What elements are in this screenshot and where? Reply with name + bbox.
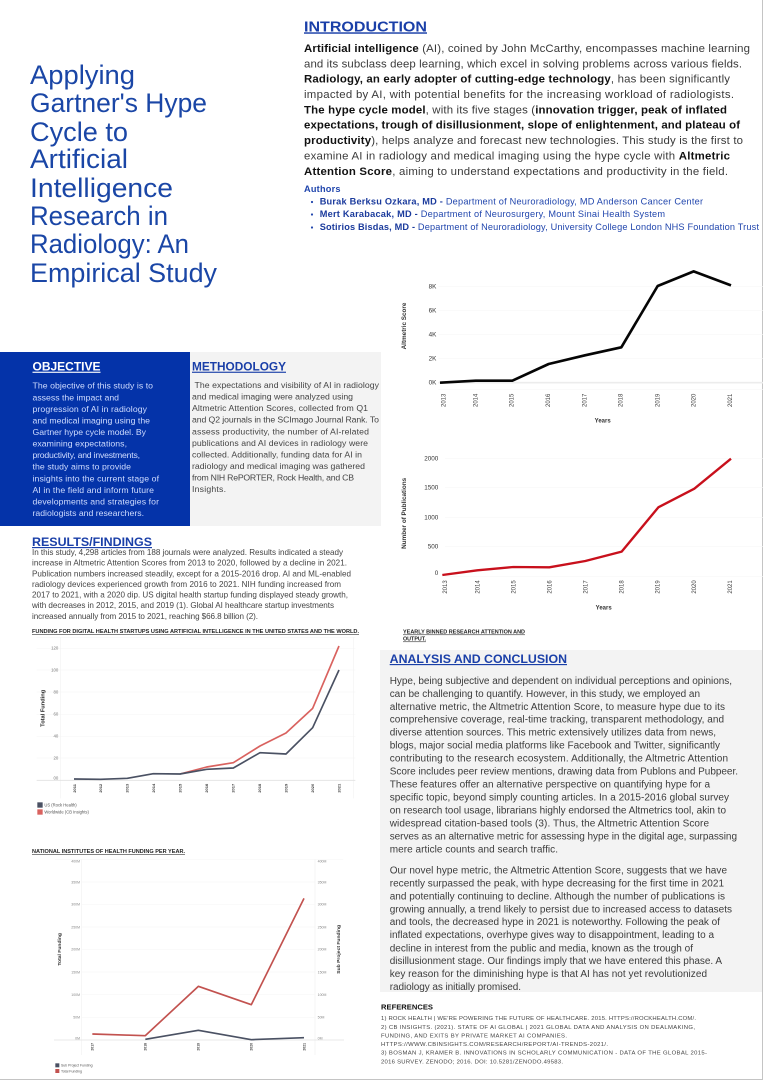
chart: NIH funding per year: 2017	[91, 1043, 95, 1051]
text block: results body: increased annually from 2015 to 2021, reaching $66.8 billion (2).	[32, 612, 258, 621]
text block: analysis paragraph one: mere article counts and search traffic.	[390, 844, 558, 856]
text block: introduction body: impacted by AI, with potential benefits for the increasing workload of radiologists.	[304, 89, 734, 101]
chart title: funding for digital health startups: FUNDING FOR DIGITAL HEALTH STARTUPS USING ARTIFICIAL INTELLIGENCE IN THE UNITED STATES AND THE WORLD.	[32, 629, 359, 635]
text block: objective body: assess the impact and	[32, 392, 119, 402]
chart: digital health startup funding: 2014	[151, 783, 156, 793]
chart: altmetric score per year: Altmetric Score	[401, 302, 408, 349]
heading: analysis and conclusion: ANALYSIS AND CONCLUSION	[390, 654, 567, 666]
chart: digital health startup funding: 80	[54, 689, 59, 694]
title: Intelligence	[30, 173, 173, 203]
text block: methodology body: publications and AI devices in radiology were	[192, 438, 368, 448]
chart: altmetric score per year: 2014	[474, 393, 480, 407]
panel: introduction	[304, 19, 759, 232]
title: Gartner's Hype	[30, 88, 207, 118]
text block: objective body: Gartner hype cycle model. By	[32, 427, 147, 437]
chart: altmetric score per year	[401, 271, 763, 425]
title: Artificial	[30, 144, 128, 174]
text block: methodology body: Insights.	[192, 484, 226, 494]
chart: altmetric score per year: 6K	[429, 307, 437, 314]
chart: NIH funding per year: 50M	[318, 1016, 325, 1020]
text block: results body: radiology devices experienced growth from 2016 to 2021. NIH funding increased from	[32, 580, 341, 589]
chart: altmetric score per year: Years	[595, 419, 611, 425]
text block: introduction body: Radiology, an early adopter of cutting-edge technology, has been significantly	[304, 74, 730, 86]
chart: number of publications per year: 1500	[424, 485, 439, 492]
title: Empirical Study	[30, 258, 218, 288]
text block: analysis paragraph two: disillusionment stage. Our findings imply that we have entered this phase. A	[390, 956, 722, 967]
text block: objective body: the study aims to provide	[32, 462, 131, 472]
text block: analysis paragraph two: key reason for the diminishing hype is that AI has not yet revolutionized	[390, 969, 707, 980]
text block: references list: 2) CB INSIGHTS. (2021). STATE OF AI GLOBAL | 2021 GLOBAL DATA AND ANALYSIS ON DEALMAKING,	[381, 1025, 695, 1031]
chart: altmetric score per year: 4K	[429, 332, 437, 339]
chart: altmetric score per year: 2015	[510, 393, 516, 407]
chart: digital health startup funding: 120	[51, 646, 59, 651]
text block: analysis paragraph two: radiology as initially promised.	[390, 982, 521, 993]
chart: number of publications per year: 0	[435, 570, 439, 577]
chart: NIH funding per year: 250M	[318, 925, 326, 929]
chart: altmetric score per year: 2016	[546, 393, 552, 407]
text block: objective body: The objective of this study is to	[32, 381, 153, 391]
chart title: national institutes of health funding: NATIONAL INSTITUTES OF HEALTH FUNDING PER YEAR.	[32, 849, 185, 855]
text block: results body	[31, 548, 351, 621]
text block: results body: In this study, 4,298 articles from 188 journals were analyzed. Results indicated a steady	[32, 548, 344, 557]
text block: introduction body	[304, 43, 750, 178]
chart: NIH funding per year: 100M	[71, 993, 80, 997]
chart: digital health startup funding	[37, 637, 355, 815]
chart: number of publications per year: 2014	[475, 580, 481, 594]
text block: analysis paragraph one: diverse attention sources. This metric extensively utilizes data from news,	[390, 728, 716, 738]
text block: analysis paragraph two	[390, 866, 732, 993]
text block: results body: increase in Altmetric Attention Scores from 2013 to 2020, followed by a decline in 2021.	[32, 559, 347, 568]
caption: yearly binned research attention and output	[403, 630, 525, 642]
chart: number of publications per year: Number of Publications	[401, 477, 408, 549]
text block: references list: HTTPS://WWW.CBINSIGHTS.COM/RESEARCH/REPORT/AI-TRENDS-2021/.	[381, 1042, 608, 1048]
text block: analysis paragraph one: comprehensive coverage, real-time tracking, transparent methodology, and	[390, 714, 724, 726]
chart: number of publications per year	[401, 456, 763, 611]
chart: number of publications per year: 2021	[728, 580, 734, 594]
text block: analysis paragraph two: inflated expectations, overhype gives way to disappointment, leading to a	[390, 930, 714, 941]
chart: number of publications per year: 1000	[424, 514, 439, 521]
text block: authors: Mert Karabacak, MD - Department of Neurosurgery, Mount Sinai Health System	[320, 209, 665, 219]
text block: analysis paragraph one: on research tool usage, librarians highly endorsed the Altmetrics tool, akin to	[390, 806, 726, 816]
panel: analysis and conclusion	[380, 650, 762, 993]
chart: digital health startup funding: 2021	[336, 783, 341, 793]
chart: NIH funding per year: 400M	[318, 860, 326, 864]
text block: analysis paragraph one: contributing to the research ecosystem. Additionally, the Altmetric Attention	[390, 754, 728, 764]
chart: digital health startup funding: 2019	[283, 783, 288, 793]
text block: introduction body: and its subclass deep learning, which excel in solving problems across various fields.	[304, 58, 742, 70]
text block: objective body: productivity, and investments,	[32, 450, 140, 460]
text block: methodology body: radiology and medical imaging was gathered	[192, 461, 365, 471]
chart: digital health startup funding: 20	[54, 755, 59, 760]
text block: objective body: insights into the current stage of	[32, 473, 160, 483]
text block: analysis paragraph one: widespread citation-based tools (3). Thus, the Altmetric Attention Score	[389, 819, 709, 830]
chart: NIH funding per year	[54, 859, 344, 1073]
chart: number of publications per year: 2013	[443, 580, 449, 594]
chart: NIH funding per year: 2020	[250, 1043, 254, 1051]
panel: references	[381, 1002, 707, 1066]
chart: digital health startup funding: 2013	[125, 783, 130, 793]
chart: number of publications per year: Years	[596, 605, 612, 611]
heading: introduction: INTRODUCTION	[304, 19, 427, 35]
legend: Sub Project Funding	[61, 1064, 93, 1068]
text block: results body: with decreases in 2012, 2015, and 2019 (1). Global AI healthcare startup investments	[31, 601, 334, 610]
text block: objective body: progression of AI in radiology	[32, 404, 148, 414]
text block: references list	[381, 1016, 707, 1066]
chart: altmetric score per year: 2018	[619, 393, 625, 407]
chart: digital health startup funding: Total Funding	[40, 689, 46, 727]
title: Applying	[30, 60, 135, 90]
chart: altmetric score per year: 0K	[429, 380, 437, 387]
text block: references list: 2016 SURVEY. ZENODO; 2016. DOI: 10.5281/ZENODO.49583.	[381, 1060, 563, 1066]
chart: NIH funding per year: 200M	[71, 948, 80, 952]
text block: objective body: AI in the field and inform future	[32, 485, 154, 495]
text block: analysis paragraph two: recently surpassed the peak, with hype decreasing for the first time in 2021	[390, 878, 724, 890]
text block: introduction body: Artificial intelligence (AI), coined by John McCarthy, encompasses machine learning	[304, 43, 750, 55]
panel: methodology	[190, 352, 381, 526]
chart: digital health startup funding: 00	[54, 775, 59, 780]
text block: analysis paragraph one: alternative metric, the Altmetric Attention Score, to measure hype due to its	[390, 702, 725, 713]
chart: NIH funding per year: 350M	[318, 880, 326, 884]
text block: objective body: developments and strategies for	[32, 496, 159, 506]
caption: yearly binned research attention and output: YEARLY BINNED RESEARCH ATTENTION AND	[403, 630, 525, 636]
text block: results body: 2017 to 2021, with a 2020 dip. US digital health startup funding displayed steady growth,	[32, 591, 348, 600]
chart: digital health startup funding: 2015	[177, 783, 182, 793]
legend	[37, 802, 89, 815]
chart: NIH funding per year: 150M	[71, 970, 80, 974]
text block: methodology body: and medical imaging were analyzed using	[192, 392, 353, 402]
title: Radiology: An	[30, 229, 189, 259]
heading: results/findings: RESULTS/FINDINGS	[32, 537, 152, 549]
chart: NIH funding per year: 2018	[144, 1043, 148, 1051]
title: Cycle to	[30, 117, 128, 147]
text block: objective body: radiologists and researchers.	[32, 508, 144, 518]
heading: methodology: METHODOLOGY	[192, 362, 286, 374]
text block: methodology body: from NIH RePORTER, Rock Health, and CB	[192, 473, 354, 483]
text block: authors: Sotirios Bisdas, MD - Department of Neuroradiology, University College London NHS Foundation Trust	[320, 222, 759, 232]
text block: references list: 3) BOSMAN J, KRAMER B. INNOVATIONS IN SCHOLARLY COMMUNICATION - DATA OF THE GLOBAL 2015-	[381, 1050, 707, 1056]
text block: methodology body: and Q2 journals in the SCImago Journal Rank. To	[192, 415, 379, 425]
text block: authors: Burak Berksu Ozkara, MD - Department of Neuroradiology, MD Anderson Cancer Center	[320, 197, 703, 207]
text block: methodology body: The expectations and visibility of AI in radiology	[194, 380, 380, 390]
chart: NIH funding per year: 0M	[75, 1036, 80, 1040]
text block: results body: Publication numbers increased steadily, except for a 2015-2016 drop. AI and ML-enabled	[32, 569, 351, 578]
legend: Worldwide (CB Insights)	[44, 809, 89, 814]
chart: digital health startup funding: 60	[54, 712, 59, 717]
heading: references: REFERENCES	[381, 1002, 433, 1012]
text block: analysis paragraph one	[389, 676, 738, 856]
chart: NIH funding per year: 300M	[318, 903, 326, 907]
text block: introduction body: examine AI in radiology and medical imaging using the hype cycle with Altmetric	[304, 151, 730, 163]
heading: objective: OBJECTIVE	[32, 362, 101, 374]
panel: objective	[0, 352, 190, 526]
chart: altmetric score per year: 2017	[582, 393, 588, 407]
chart: digital health startup funding: 2020	[310, 783, 315, 793]
text block: objective body	[32, 381, 160, 518]
text block: introduction body: The hype cycle model, with its five stages (innovation trigger, peak of inflated	[304, 104, 727, 116]
chart: altmetric score per year: 2019	[655, 393, 661, 407]
text block: authors: Authors	[304, 184, 340, 194]
chart: number of publications per year: 2000	[424, 456, 439, 463]
chart: NIH funding per year: 100M	[318, 993, 326, 997]
chart: NIH funding per year: 350M	[71, 880, 80, 884]
chart: number of publications per year: 2020	[692, 580, 698, 594]
chart: number of publications per year: 2017	[583, 580, 589, 594]
chart: number of publications per year: 500	[428, 544, 439, 551]
chart: NIH funding per year: Total Funding	[57, 933, 63, 966]
chart: digital health startup funding: 2018	[257, 783, 262, 793]
chart: altmetric score per year: 8K	[429, 283, 437, 290]
legend: US (Rock Health)	[44, 802, 77, 807]
text block: methodology body: Altmetric Attention Scores, collected from Q1	[192, 403, 368, 413]
chart: NIH funding per year: Sub Project Funding	[336, 925, 342, 974]
chart: altmetric score per year: 2020	[692, 393, 698, 407]
text block: methodology body: assess productivity, the number of AI-related	[192, 426, 369, 436]
caption: yearly binned research attention and output: OUTPUT.	[403, 636, 426, 642]
chart: NIH funding per year: 300M	[71, 903, 80, 907]
chart: digital health startup funding: 100	[51, 667, 59, 672]
chart: altmetric score per year: 2021	[728, 393, 734, 407]
text block: analysis paragraph one: Hype, being subjective and dependent on individual perceptions and opinions,	[390, 676, 732, 687]
chart: NIH funding per year: 0M	[318, 1036, 323, 1040]
text block: analysis paragraph one: Score includes peer review mentions, drawing data from Publons and Pubpeer.	[390, 766, 738, 778]
chart: NIH funding per year: 200M	[318, 948, 326, 952]
chart: NIH funding per year: 2021	[302, 1043, 306, 1051]
text block: objective body: examining expectations,	[32, 439, 127, 449]
chart: NIH funding per year: 150M	[318, 970, 326, 974]
text block: analysis paragraph two: decline in interest from the public and media, known as the trough of	[390, 944, 693, 954]
title: Research in	[30, 201, 168, 231]
legend	[55, 1063, 93, 1073]
chart: number of publications per year: 2019	[656, 580, 662, 594]
chart: digital health startup funding: 2017	[230, 783, 235, 793]
chart: number of publications per year: 2015	[511, 580, 517, 594]
text block: analysis paragraph one: serves as an alternative metric for assessing hype in the digital age, surpassing	[390, 832, 737, 842]
text block: objective body: and medical imaging using the	[32, 415, 150, 425]
text block: analysis paragraph two: and tools, the decreased hype in 2021 is noteworthy. Following the peak of	[390, 917, 720, 928]
text block: introduction body: Attention Score, aiming to understand expectations and productivity in the field.	[304, 166, 728, 178]
chart: altmetric score per year: 2013	[441, 393, 447, 407]
chart: NIH funding per year: 2019	[197, 1043, 201, 1051]
chart: number of publications per year: 2016	[547, 580, 553, 594]
text block: analysis paragraph one: blogs, major social media platforms like Facebook and Twitter, significantly	[390, 740, 720, 752]
text block: methodology body: collected. Additionally, funding data for AI in	[192, 449, 362, 459]
chart: digital health startup funding: 2011	[72, 783, 77, 793]
legend: Total Funding	[61, 1069, 82, 1073]
text block: references list: 1) ROCK HEALTH | WE'RE POWERING THE FUTURE OF HEALTHCARE. 2015. HTTPS://ROCKHEALTH.COM/.	[381, 1016, 696, 1022]
text block: introduction body: expectations, trough of disillusionment, slope of enlightenment, and plateau of	[304, 120, 740, 132]
text block: authors	[304, 184, 759, 232]
chart: number of publications per year: 2018	[620, 580, 626, 594]
chart: NIH funding per year: 250M	[71, 925, 80, 929]
title	[30, 60, 218, 288]
text block: analysis paragraph one: specific topic, beyond simply counting articles. In a 2015-2016 global survey	[390, 792, 729, 804]
text block: introduction body: productivity), helps analyze and forecast new technologies. This study is the first to	[304, 135, 743, 147]
text block: analysis paragraph two: and potentially continuing to decline. Although the number of publications is	[390, 892, 725, 902]
panel: results and findings	[31, 537, 351, 621]
chart: digital health startup funding: 2012	[98, 783, 103, 793]
text block: analysis paragraph two: Our novel hype metric, the Altmetric Attention Score, suggests that we have	[390, 866, 727, 876]
text block: references list: FUNDING, AND EXITS BY PRIVATE MARKET AI COMPANIES.	[381, 1034, 567, 1040]
text block: analysis paragraph one: can be challenging to quantify. However, in this study, we employed an	[390, 689, 700, 700]
chart: altmetric score per year: 2K	[429, 356, 437, 363]
chart: NIH funding per year: 400M	[71, 860, 80, 864]
text block: methodology body	[192, 380, 380, 494]
text block: analysis paragraph two: growing annually, a trend likely to persist due to increased access to datasets	[390, 904, 732, 916]
chart: NIH funding per year: 50M	[73, 1016, 80, 1020]
chart: digital health startup funding: 40	[54, 734, 59, 739]
text block: analysis paragraph one: These features offer an alternative perspective on quantifying hype for a	[390, 780, 710, 790]
chart: digital health startup funding: 2016	[204, 783, 209, 793]
